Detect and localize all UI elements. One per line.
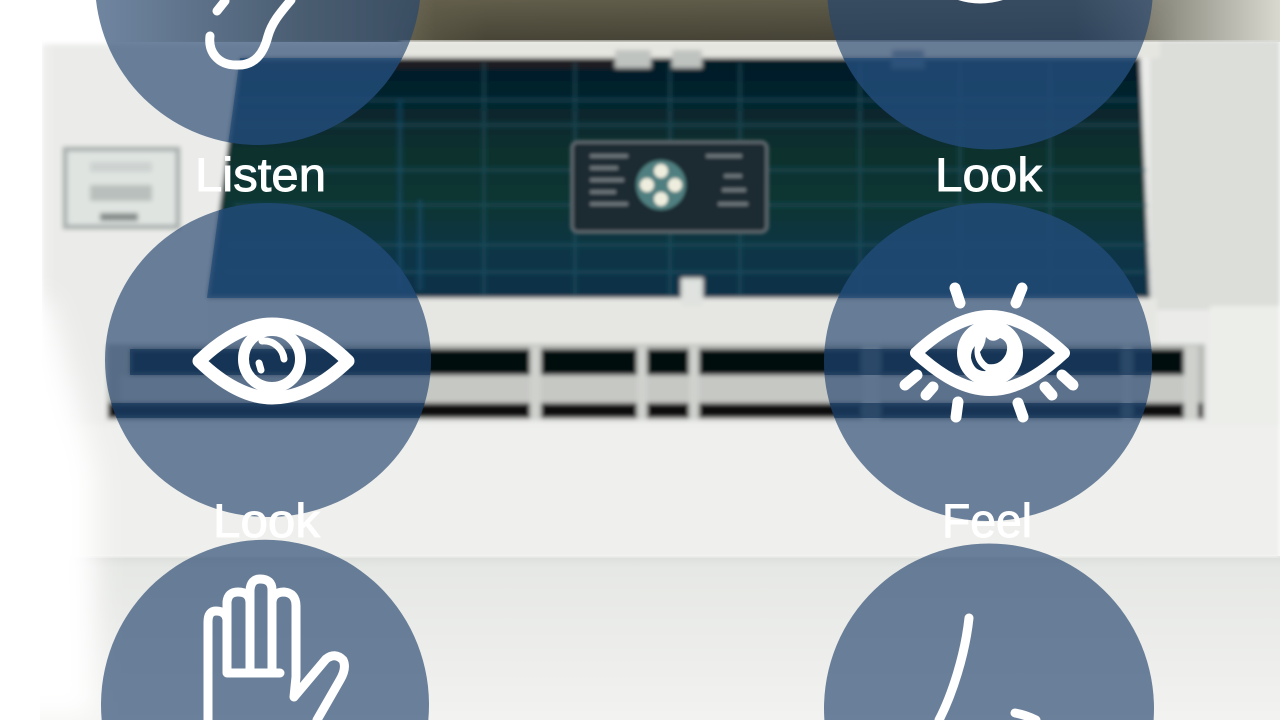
icon rays [905,288,1073,417]
icon: top right partial arc [958,0,1003,4]
circle: middle right [824,203,1152,521]
label: Look (lower left): Look [213,494,321,547]
label: Look (top right): Look [935,148,1043,201]
circle: middle left [105,203,431,517]
label: Feel: Feel [942,494,1032,547]
icon: ear [210,0,291,65]
icon: eye (left) [199,324,348,398]
control display panel [572,142,767,232]
circle: top left [96,0,420,145]
icon: eye with rays (right) [905,288,1073,417]
icon: hand curve partial [939,618,1036,720]
blue tint of the unit seen through the circles [108,58,1203,418]
circle: top right [828,0,1152,149]
circle: bottom right [824,544,1154,720]
circle: bottom left [101,540,429,720]
label: Listen: Listen [195,148,326,201]
icon: hand [208,579,344,720]
